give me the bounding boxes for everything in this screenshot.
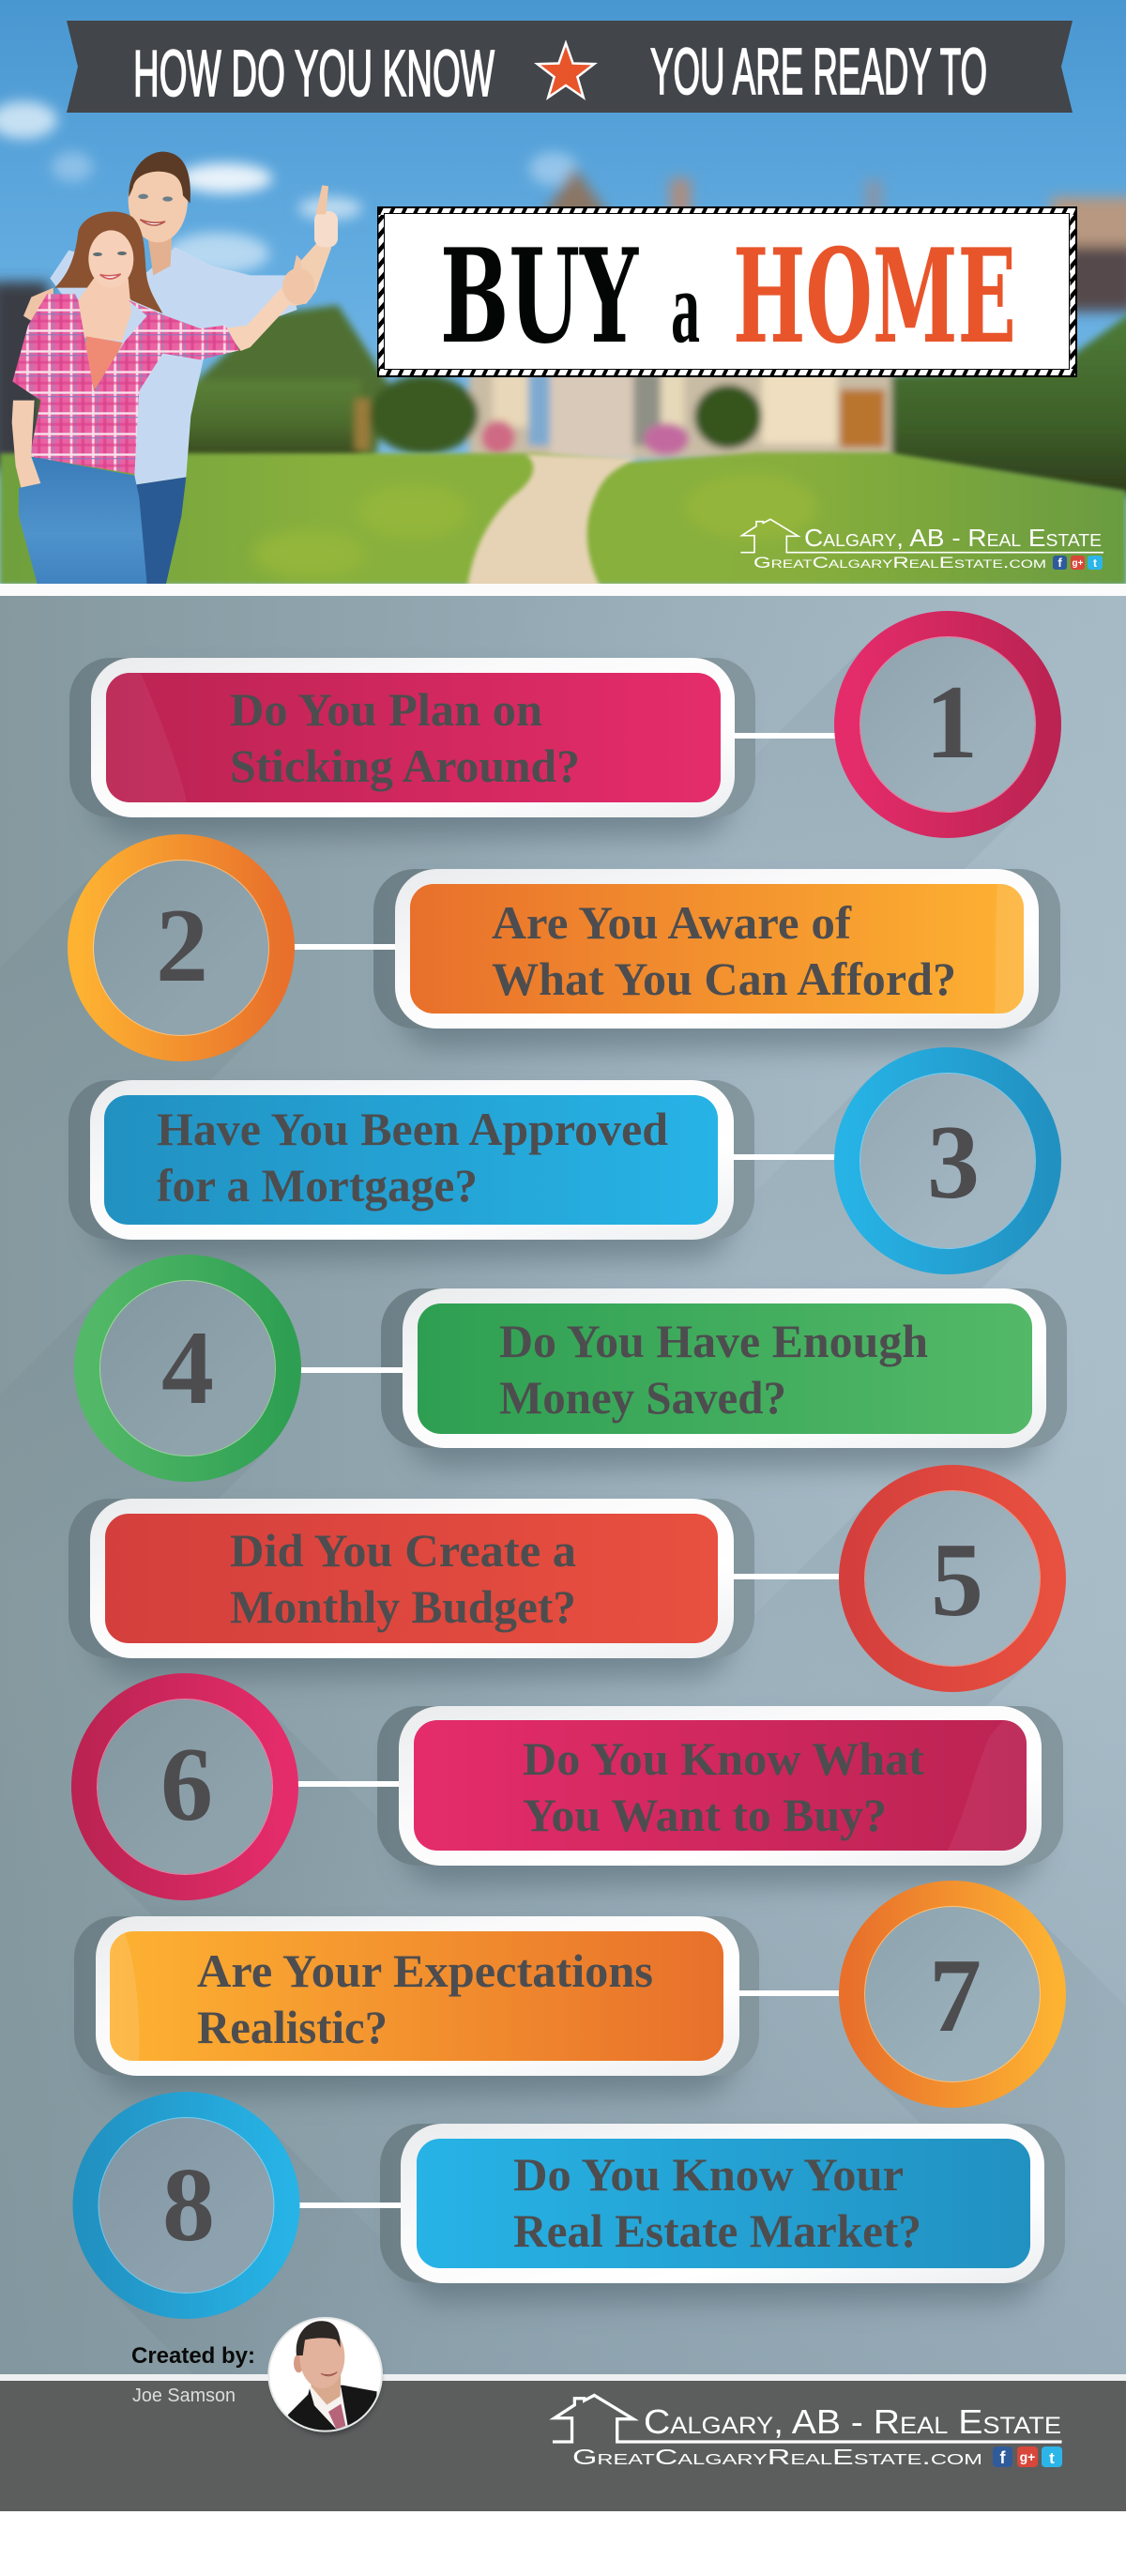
pill 5: Monthly Budget? — [230, 1580, 576, 1633]
neck — [311, 2374, 342, 2404]
pill 7: Realistic? — [197, 2001, 388, 2053]
connector 3 — [732, 1154, 837, 1160]
icon: facebook: f — [1000, 2448, 1006, 2467]
ring 2: 2 — [156, 888, 208, 1004]
icon: twitter — [1042, 2446, 1062, 2467]
man's hair — [129, 152, 190, 204]
pill 4: Do You Have Enough — [499, 1315, 928, 1367]
connector 7 — [737, 1990, 841, 1996]
connector 5 — [732, 1574, 839, 1579]
man's eyes and smile — [138, 194, 173, 225]
logo: footer calgary real estate — [553, 2395, 1062, 2469]
icon: twitter — [1088, 556, 1103, 570]
hair — [297, 2321, 341, 2355]
logo: footer calgary real estate: Calgary, AB - Real Estate — [644, 2402, 1061, 2441]
ring 8 — [86, 2105, 287, 2306]
icon: facebook — [1053, 556, 1067, 570]
icon: twitter: t — [1093, 556, 1097, 570]
avatar: joe samson portrait — [267, 2317, 383, 2435]
connector 6 — [296, 1781, 401, 1787]
logo: footer calgary real estate: GreatCalgaryRealEstate.com — [572, 2445, 982, 2469]
shirt and collar — [309, 2386, 348, 2429]
pill 8: Do You Know Your — [513, 2148, 904, 2201]
woman's eyes and smile — [93, 252, 127, 279]
face — [300, 2337, 345, 2388]
pill 1 — [91, 658, 735, 817]
pill 6: Do You Know What — [523, 1732, 924, 1785]
icon: google plus — [1071, 556, 1085, 570]
woman's lower arm and hand — [12, 401, 59, 491]
credit: joe samson: Joe Samson — [132, 2385, 236, 2406]
step 6 — [84, 1686, 1063, 1887]
pill 7 — [96, 1916, 739, 2076]
pill 2: Are You Aware of — [492, 896, 852, 949]
woman's jeans — [19, 457, 147, 585]
pill 1: Sticking Around? — [230, 739, 580, 792]
icon: google plus: g+ — [1020, 2449, 1035, 2464]
illustration: couple giving thumbs up — [12, 152, 338, 585]
connector 1 — [732, 733, 837, 739]
woman's plaid shirt — [12, 294, 239, 474]
icon: facebook: f — [1058, 556, 1062, 570]
pill 8 — [401, 2124, 1044, 2283]
man's jeans — [83, 477, 186, 585]
man's shirt — [50, 247, 297, 485]
woman's chest — [78, 279, 131, 341]
ring 3: 3 — [927, 1105, 980, 1221]
woman's tank top — [84, 336, 123, 391]
ring 5 — [852, 1478, 1053, 1679]
pill 1: Do You Plan on — [230, 683, 542, 736]
ring 4: 4 — [161, 1310, 214, 1426]
logo: header calgary real estate: GreatCalgaryRealEstate.com — [753, 554, 1046, 572]
pill 2 — [395, 869, 1039, 1029]
panel: hero photo background with lawn, house and sky — [0, 0, 1126, 587]
ring 6: 6 — [160, 1727, 213, 1843]
step 7 — [74, 1894, 1053, 2096]
ring 7 — [852, 1894, 1053, 2095]
pill 8: Real Estate Market? — [513, 2204, 921, 2257]
woman's hair — [54, 212, 162, 313]
pill 4 — [403, 1288, 1046, 1448]
credit: created by: Created by: — [131, 2343, 255, 2369]
pill 6: You Want to Buy? — [523, 1789, 887, 1841]
pill 7: Are Your Expectations — [197, 1944, 653, 1997]
logo: header calgary real estate: Calgary, AB - Real Estate — [804, 524, 1102, 552]
man's neck — [147, 232, 172, 275]
icon: facebook — [993, 2446, 1012, 2467]
tie — [328, 2404, 345, 2429]
pill 3: Have You Been Approved — [157, 1103, 668, 1155]
ring 1: 1 — [925, 664, 978, 781]
man's face — [129, 158, 188, 242]
step 4 — [87, 1268, 1067, 1469]
icon: twitter: t — [1049, 2449, 1055, 2467]
ring 3 — [847, 1060, 1048, 1261]
pill 3: for a Mortgage? — [157, 1159, 478, 1212]
pill 3 — [90, 1080, 734, 1240]
woman's face — [88, 230, 133, 288]
ring 7: 7 — [929, 1938, 981, 2054]
step 8 — [86, 2105, 1065, 2306]
panel: questions background — [0, 596, 1126, 2485]
suit — [288, 2385, 377, 2433]
footer band — [0, 2374, 1126, 2511]
ring 1 — [847, 624, 1048, 825]
step 3 — [68, 1060, 1048, 1261]
icon: google plus — [1017, 2446, 1038, 2467]
step 2 — [81, 847, 1060, 1049]
icon: google plus: g+ — [1073, 558, 1084, 569]
ring 2 — [81, 847, 282, 1048]
man's raised arm and thumb — [288, 185, 338, 307]
ring 4 — [87, 1268, 288, 1469]
ear — [294, 2355, 302, 2372]
white divider below hero — [0, 584, 1126, 596]
pill 4: Money Saved? — [499, 1371, 786, 1424]
logo: header calgary real estate — [740, 519, 1103, 572]
pill 5: Did You Create a — [230, 1524, 576, 1577]
ring 6 — [84, 1686, 285, 1887]
pill 5 — [90, 1499, 734, 1658]
step 5 — [68, 1478, 1053, 1679]
connector 4 — [300, 1367, 405, 1373]
step 1 — [69, 624, 1048, 837]
ring 5: 5 — [931, 1522, 983, 1639]
icon: star — [538, 43, 594, 98]
banner: how do you know you are ready to — [67, 21, 1073, 113]
man's hand on her shoulder — [23, 288, 54, 325]
pill 2: What You Can Afford? — [492, 953, 956, 1005]
title word a: a — [671, 250, 700, 364]
ring 8: 8 — [162, 2147, 215, 2264]
connector 8 — [297, 2203, 403, 2208]
title word buy: BUY — [440, 220, 639, 373]
smile — [321, 2372, 337, 2376]
title box: buy a home — [377, 206, 1077, 377]
connector 2 — [293, 944, 398, 950]
woman's arm reaching out — [225, 255, 315, 351]
heading left: HOW DO YOU KNOW — [133, 37, 495, 110]
pill 6 — [399, 1706, 1042, 1866]
